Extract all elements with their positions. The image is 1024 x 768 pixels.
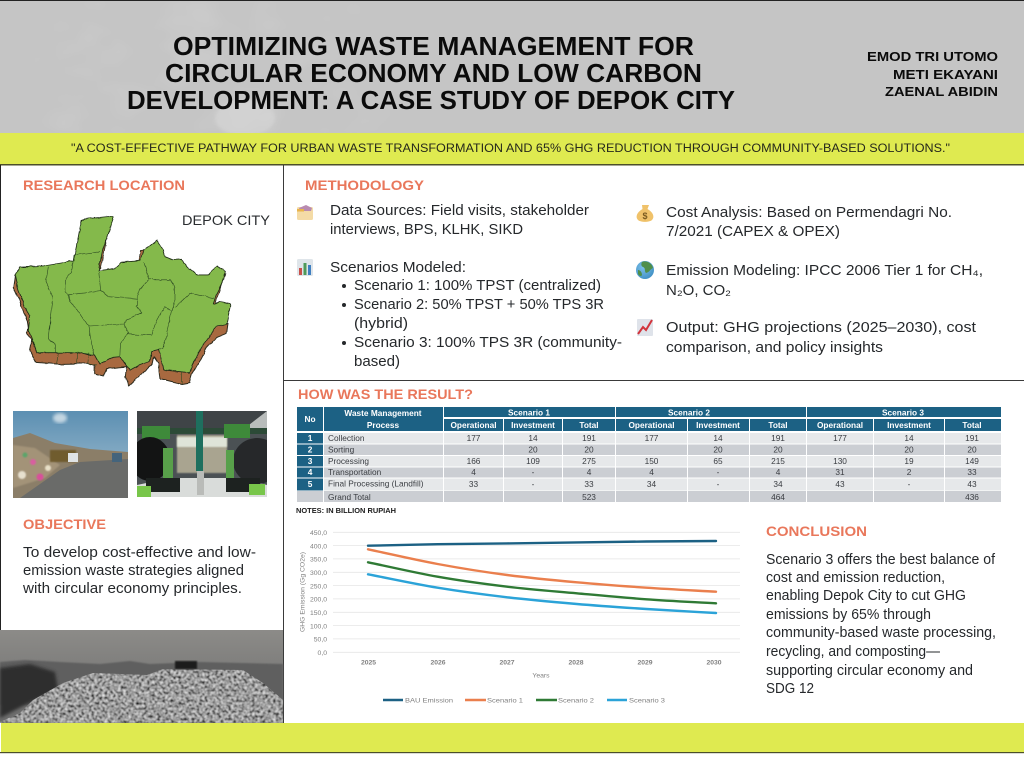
text: scenarios modeled: based) bbox=[354, 354, 400, 370]
text: scenarios modeled: Scenario 1: 100% TPST (centralized) bbox=[354, 278, 601, 294]
row: sorting: 20 bbox=[713, 444, 723, 454]
title bbox=[127, 31, 735, 115]
text: output: Output: GHG projections (2025–2030), cost bbox=[666, 320, 976, 336]
y axis title: GHG Emission (Gg CO2e) bbox=[300, 552, 306, 632]
table header labels: Total bbox=[579, 420, 599, 430]
authors bbox=[867, 49, 998, 99]
header banner bbox=[0, 0, 1024, 136]
y axis labels bbox=[310, 530, 327, 657]
row: processing: 19 bbox=[904, 456, 914, 466]
authors: EMOD TRI UTOMO bbox=[867, 49, 998, 64]
table header bbox=[297, 407, 1001, 431]
x axis labels: 2025 bbox=[361, 660, 376, 666]
row: sorting: 2 bbox=[308, 444, 313, 454]
table header labels: Investment bbox=[511, 420, 555, 430]
row: transportation: 4 bbox=[308, 467, 313, 477]
row: grand total: 464 bbox=[771, 492, 785, 502]
table header labels: Total bbox=[768, 420, 788, 430]
cost table bbox=[297, 407, 1001, 502]
table header labels: Scenario 2 bbox=[668, 408, 710, 418]
table header labels: Investment bbox=[696, 420, 740, 430]
conclusion text bbox=[766, 552, 996, 697]
row: collection: 1 bbox=[308, 433, 313, 443]
table note: NOTES: IN BILLION RUPIAH bbox=[296, 508, 396, 515]
row: sorting: 20 bbox=[773, 444, 783, 454]
table header labels: Investment bbox=[887, 420, 931, 430]
authors: ZAENAL ABIDIN bbox=[885, 84, 998, 99]
row: final processing: 43 bbox=[835, 479, 845, 489]
text: cost analysis: Cost Analysis: Based on Permendagri No. bbox=[666, 205, 952, 221]
objective text bbox=[22, 545, 256, 597]
text: data sources: Data Sources: Field visits, stakeholder bbox=[330, 203, 589, 219]
conclusion text: community-based waste processing, bbox=[766, 625, 996, 641]
icon: money bag: $ bbox=[642, 211, 648, 221]
title: DEVELOPMENT: A CASE STUDY OF DEPOK CITY bbox=[127, 85, 735, 115]
row: transportation: 4 bbox=[471, 467, 476, 477]
table header labels bbox=[304, 408, 982, 430]
y axis labels: 350,0 bbox=[310, 557, 327, 564]
heading: conclusion: CONCLUSION bbox=[766, 523, 867, 539]
title: CIRCULAR ECONOMY AND LOW CARBON bbox=[165, 58, 702, 88]
text: data sources: interviews, BPS, KLHK, SIKD bbox=[330, 222, 523, 238]
row: collection: 191 bbox=[965, 433, 979, 443]
y axis labels: 200,0 bbox=[310, 597, 327, 604]
x axis labels: 2030 bbox=[706, 660, 722, 666]
footer band bbox=[0, 723, 1024, 753]
icon: globe bbox=[636, 261, 654, 279]
row: grand total: 523 bbox=[582, 492, 596, 502]
text: emission modeling: Emission Modeling: IPCC 2006 Tier 1 for CH₄, bbox=[666, 263, 983, 279]
y axis labels: 100,0 bbox=[310, 623, 327, 630]
map of Depok City bbox=[13, 216, 231, 386]
row: processing: 3 bbox=[308, 456, 313, 466]
row: processing: 130 bbox=[833, 456, 847, 466]
text: cost analysis: 7/2021 (CAPEX & OPEX) bbox=[666, 224, 840, 240]
text: emission modeling: N₂O, CO₂ bbox=[666, 283, 731, 299]
row: transportation: 4 bbox=[587, 467, 592, 477]
conclusion text: Scenario 3 offers the best balance of bbox=[766, 552, 996, 568]
label: Depok City: DEPOK CITY bbox=[182, 212, 271, 228]
row: sorting: 20 bbox=[528, 444, 538, 454]
row: final processing: - bbox=[717, 479, 720, 489]
table header labels: Scenario 3 bbox=[882, 408, 924, 418]
row: processing: 275 bbox=[582, 456, 596, 466]
table row shading bbox=[297, 433, 1001, 502]
row: final processing: 5 bbox=[308, 479, 313, 489]
series: scenario 2 bbox=[368, 562, 716, 603]
row: transportation: - bbox=[717, 467, 720, 477]
heading: how was the result: HOW WAS THE RESULT? bbox=[298, 386, 473, 402]
text: scenarios modeled: (hybrid) bbox=[354, 316, 408, 332]
row: processing: 215 bbox=[771, 456, 785, 466]
conclusion text: cost and emission reduction, bbox=[766, 570, 945, 586]
row: collection: 191 bbox=[771, 433, 785, 443]
table header labels: Operational bbox=[450, 420, 497, 430]
y axis labels: 400,0 bbox=[310, 543, 327, 550]
row: sorting: 20 bbox=[584, 444, 594, 454]
tagline band: "A COST-EFFECTIVE PATHWAY FOR URBAN WASTE TRANSFORMATION AND 65% GHG REDUCTION THROUGH COMMUNITY-BASED SOLUTIONS." bbox=[71, 143, 950, 155]
heading: methodology: METHODOLOGY bbox=[305, 177, 425, 193]
row: collection: 177 bbox=[645, 433, 659, 443]
objective text: with circular economy principles. bbox=[22, 581, 242, 597]
y axis labels: 250,0 bbox=[310, 583, 327, 590]
row: processing: 65 bbox=[713, 456, 723, 466]
row: final processing: 34 bbox=[647, 479, 656, 489]
conclusion text: recycling, and composting— bbox=[766, 644, 940, 660]
icon: folder bbox=[297, 205, 313, 220]
row: transportation: 2 bbox=[907, 467, 912, 477]
row: grand total: 436 bbox=[965, 492, 979, 502]
row: collection: 14 bbox=[528, 433, 538, 443]
tagline band bbox=[0, 133, 1024, 166]
text: scenarios modeled: Scenario 3: 100% TPS 3R (community- bbox=[354, 335, 622, 351]
text: output bbox=[666, 320, 976, 356]
table header labels: Operational bbox=[817, 420, 863, 430]
series: scenario 1 bbox=[368, 549, 716, 592]
table header labels: Scenario 1 bbox=[508, 408, 550, 418]
x axis labels: 2026 bbox=[430, 660, 446, 666]
row: processing: 150 bbox=[645, 456, 659, 466]
row: grand total bbox=[328, 492, 979, 502]
x axis labels bbox=[361, 660, 722, 666]
chart legend: Scenario 2 bbox=[558, 698, 594, 704]
table header labels: Waste Management bbox=[344, 408, 422, 418]
row: sorting bbox=[308, 444, 977, 454]
table header labels: Process bbox=[367, 420, 400, 430]
row: sorting: Sorting bbox=[328, 444, 355, 454]
photo: waste processing machinery bbox=[137, 411, 267, 497]
chart legend: Scenario 3 bbox=[629, 698, 665, 704]
row: collection: Collection bbox=[328, 433, 365, 443]
objective text: To develop cost-effective and low- bbox=[23, 545, 256, 561]
chart legend: Scenario 1 bbox=[487, 698, 523, 704]
row: final processing bbox=[308, 478, 977, 489]
row: transportation: 4 bbox=[649, 467, 654, 477]
row: collection: 191 bbox=[582, 433, 596, 443]
photo: landfill site bbox=[13, 411, 128, 498]
row: grand total: Grand Total bbox=[328, 492, 371, 502]
table header labels: Total bbox=[962, 420, 982, 430]
y axis labels: 50,0 bbox=[314, 637, 327, 644]
x axis labels: 2029 bbox=[637, 660, 653, 666]
x axis labels: 2027 bbox=[499, 660, 515, 666]
icon: money bag bbox=[637, 205, 653, 222]
text: scenarios modeled: Scenarios Modeled: bbox=[330, 260, 466, 276]
conclusion text: supporting circular economy and bbox=[766, 663, 973, 679]
y axis labels: 150,0 bbox=[310, 610, 327, 617]
y axis labels: 300,0 bbox=[310, 570, 327, 577]
objective text: emission waste strategies aligned bbox=[23, 563, 244, 579]
x axis title: Years bbox=[532, 672, 550, 680]
row: transportation: 33 bbox=[967, 467, 977, 477]
text: data sources bbox=[330, 203, 589, 238]
y axis labels: 0,0 bbox=[318, 650, 327, 657]
row: processing bbox=[308, 456, 979, 466]
title: OPTIMIZING WASTE MANAGEMENT FOR bbox=[173, 31, 694, 61]
row: transportation bbox=[308, 467, 977, 477]
row: final processing: Final Processing (Landfill) bbox=[328, 478, 424, 488]
x axis labels: 2028 bbox=[568, 660, 584, 666]
row: transportation: 31 bbox=[835, 467, 845, 477]
heading: objective: OBJECTIVE bbox=[23, 516, 106, 532]
y axis labels: 450,0 bbox=[310, 530, 327, 537]
authors: METI EKAYANI bbox=[893, 67, 998, 82]
row: sorting: 20 bbox=[904, 444, 914, 454]
photo: landfill mound in grayscale bbox=[0, 630, 283, 723]
conclusion text: emissions by 65% through bbox=[766, 607, 931, 623]
row: transportation: - bbox=[532, 467, 535, 477]
icon: bar chart bbox=[297, 259, 313, 276]
text: emission modeling bbox=[666, 263, 983, 299]
chart legend bbox=[383, 698, 665, 704]
row: processing: Processing bbox=[328, 456, 369, 466]
chart legend: BAU Emission bbox=[405, 698, 453, 704]
row: processing: 109 bbox=[526, 456, 540, 466]
row: final processing: 43 bbox=[967, 479, 977, 489]
row: collection: 14 bbox=[904, 433, 914, 443]
text: cost analysis bbox=[666, 205, 952, 240]
row: final processing: 33 bbox=[469, 479, 478, 489]
row: final processing: 34 bbox=[773, 479, 783, 489]
text: output: comparison, and policy insights bbox=[666, 340, 883, 356]
row: collection: 177 bbox=[467, 433, 481, 443]
row: collection: 177 bbox=[833, 433, 847, 443]
row: final processing: - bbox=[908, 479, 911, 489]
text: scenarios modeled: Scenario 2: 50% TPST + 50% TPS 3R bbox=[354, 297, 604, 313]
row: final processing: 33 bbox=[584, 479, 594, 489]
row: processing: 149 bbox=[965, 456, 979, 466]
series: BAU emission bbox=[368, 541, 716, 546]
text: scenarios modeled bbox=[330, 260, 622, 370]
row: final processing: - bbox=[532, 479, 535, 489]
table header labels: No bbox=[304, 414, 316, 424]
table header labels: Operational bbox=[628, 420, 675, 430]
row: sorting: 20 bbox=[967, 444, 977, 454]
line chart: GHG emission bbox=[300, 530, 740, 704]
row: transportation: Transportation bbox=[328, 467, 382, 477]
conclusion text: SDG 12 bbox=[766, 681, 814, 697]
heading: research location: RESEARCH LOCATION bbox=[23, 177, 185, 193]
row: processing: 166 bbox=[467, 456, 481, 466]
row: collection bbox=[308, 433, 979, 443]
row: transportation: 4 bbox=[776, 467, 781, 477]
conclusion text: enabling Depok City to cut GHG bbox=[766, 588, 966, 604]
row: collection: 14 bbox=[713, 433, 723, 443]
icon: trend chart bbox=[637, 319, 653, 336]
series: scenario 3 bbox=[368, 574, 716, 613]
